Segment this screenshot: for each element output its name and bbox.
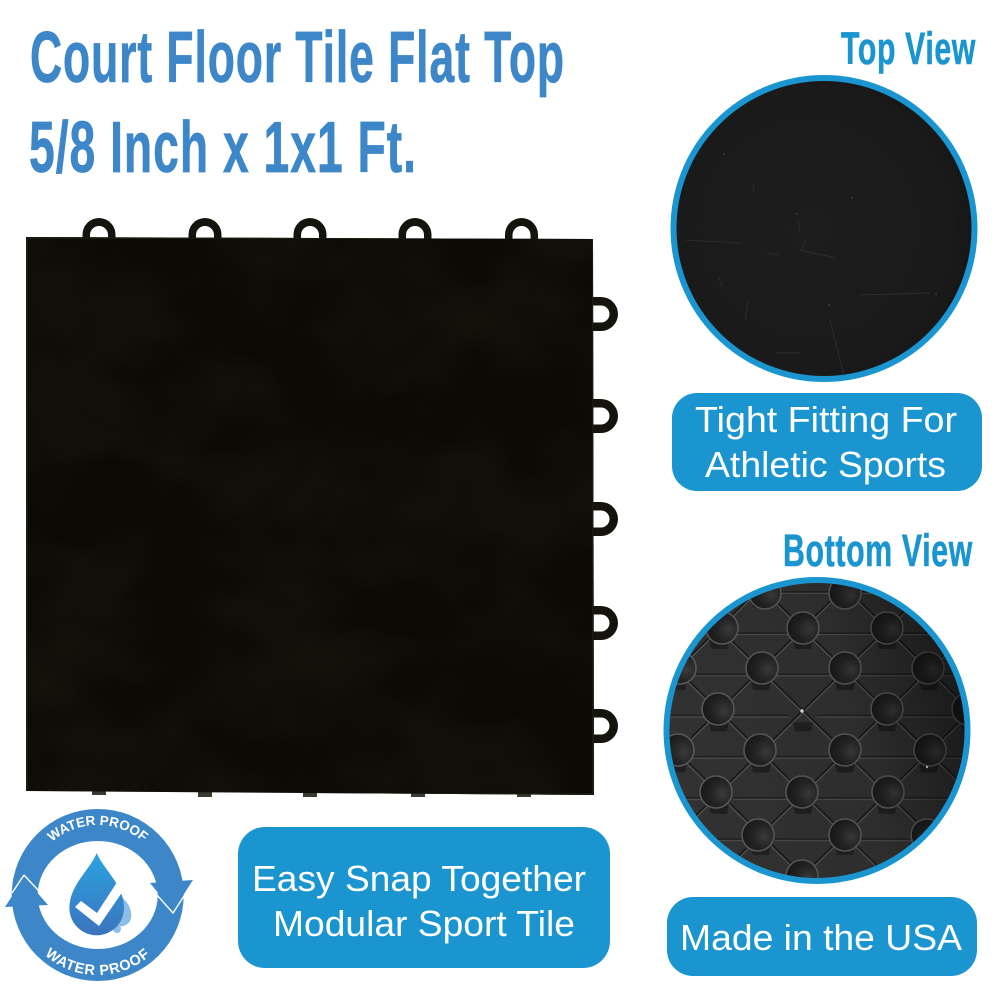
pill: easy snap together: Easy Snap Together — [252, 858, 586, 899]
pill: tight fitting — [672, 393, 982, 491]
pill: made in the usa — [667, 897, 977, 976]
pill: made in the usa: Made in the USA — [680, 917, 962, 958]
title — [29, 18, 565, 188]
right connector loops — [590, 297, 618, 743]
pill: tight fitting: Athletic Sports — [705, 444, 946, 485]
left arrow — [5, 875, 50, 907]
right arrow — [148, 880, 193, 913]
bottom view circle — [660, 570, 984, 892]
bottom connector nubs — [92, 790, 531, 797]
pill: easy snap together — [238, 827, 610, 968]
pill: tight fitting: Tight Fitting For — [695, 399, 957, 440]
icon: water proof badge — [5, 809, 193, 981]
badge label bottom: WATER PROOF — [46, 947, 148, 975]
pill: easy snap together: Modular Sport Tile — [273, 903, 575, 944]
water drop — [69, 853, 132, 935]
title line 1: Court Floor Tile Flat Top — [30, 18, 565, 98]
badge ring — [12, 809, 184, 981]
title line 2: 5/8 Inch x 1x1 Ft. — [29, 108, 417, 188]
tile surface — [26, 237, 594, 795]
tile product image — [26, 218, 618, 797]
top view circle — [674, 78, 974, 380]
badge label top: WATER PROOF — [46, 816, 149, 840]
check mark — [75, 873, 132, 926]
top connector loops — [82, 218, 538, 240]
